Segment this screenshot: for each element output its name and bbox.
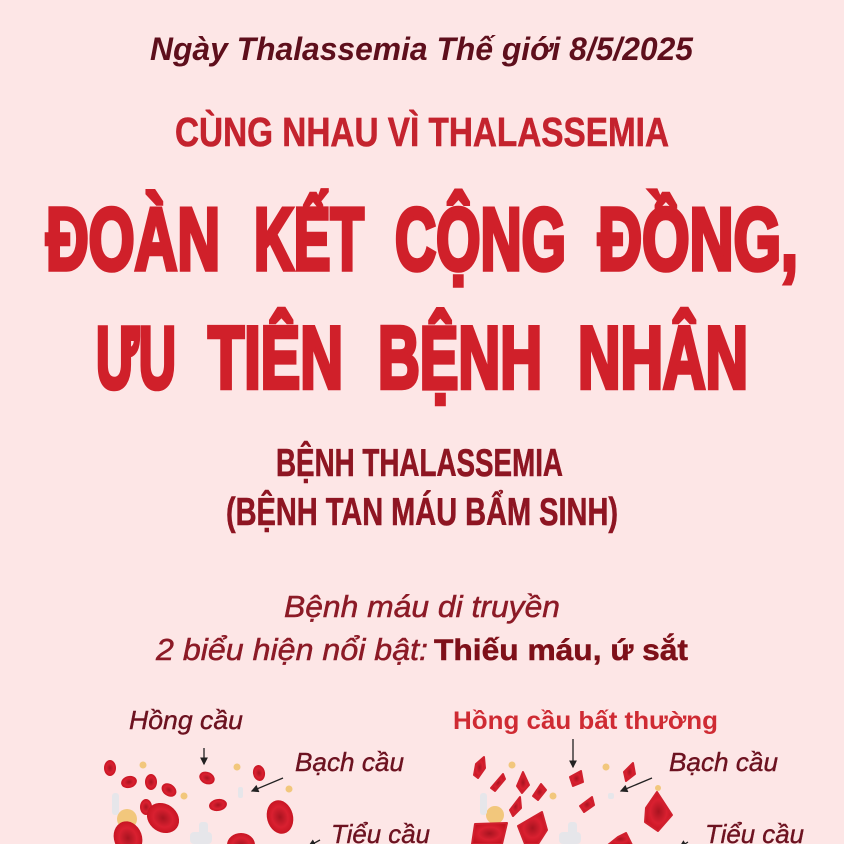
abnormal red blood cells [472, 757, 672, 844]
main headline: CỘNG [395, 190, 566, 288]
disease description: Bệnh máu di truyền [284, 589, 560, 624]
main headline: ĐOÀN [46, 190, 220, 288]
diagram: abnormal blood cells [453, 707, 804, 844]
arrows [573, 739, 688, 844]
diagram: normal blood cells [104, 705, 430, 844]
disease name: (BỆNH TAN MÁU BẨM SINH) [226, 489, 618, 534]
disease name [226, 441, 618, 534]
main headline: BỆNH [378, 308, 542, 407]
arrows [204, 748, 320, 844]
event date heading: Ngày Thalassemia Thế giới 8/5/2025 [150, 31, 694, 67]
label: white blood cell: Bạch cầu [295, 747, 404, 777]
label: red blood cell: Hồng cầu [129, 705, 243, 735]
disease description: 2 biểu hiện nổi bật: [155, 632, 428, 667]
red blood cells [104, 760, 297, 844]
white blood cells [480, 793, 614, 844]
platelets [117, 762, 292, 829]
main headline [46, 190, 798, 407]
disease name: BỆNH THALASSEMIA [276, 441, 563, 485]
main headline: KẾT [254, 190, 364, 288]
disease description [155, 589, 688, 667]
main headline: TIÊN [208, 308, 343, 407]
theme subtitle: CÙNG NHAU VÌ THALASSEMIA [175, 109, 669, 155]
platelets [486, 762, 661, 824]
disease description: Thiếu máu, ứ sắt [434, 633, 688, 667]
label: abnormal red blood cell: Hồng cầu bất thường [453, 707, 718, 735]
label: white blood cell: Bạch cầu [669, 747, 778, 777]
white blood cells [112, 787, 243, 844]
main headline: ƯU [96, 308, 176, 407]
main headline: NHÂN [578, 308, 748, 407]
